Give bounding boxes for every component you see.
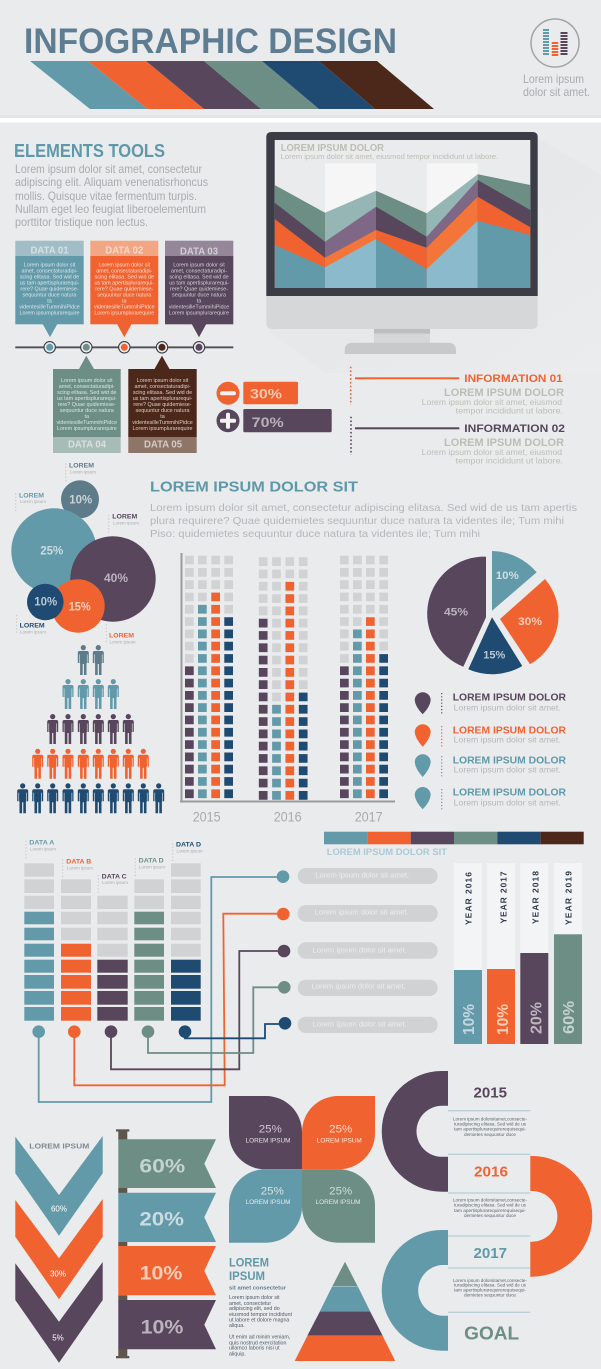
panel: data 01 callout: Lorem ipsumplurarequire — [20, 310, 79, 316]
petal: orange — [302, 1096, 375, 1169]
people row 5 — [17, 783, 164, 813]
bubble labels: Lorem ipsum — [113, 520, 139, 525]
information 01: tempor incididunt ut labore. — [456, 406, 563, 416]
text block: lorem ipsum: quis nostrud exercitation — [229, 1340, 286, 1346]
panel: data 01 callout — [15, 241, 84, 337]
segmented bar chart — [24, 863, 201, 1021]
half ring: teal — [382, 1230, 448, 1351]
connector: orange — [68, 908, 290, 1085]
panel: data 01 callout: amet, consectaturadipi- — [21, 268, 78, 274]
monitor chin — [266, 296, 538, 329]
text block: lorem ipsum: ut labore et dolore magna — [229, 1317, 289, 1323]
panel: data 03 callout: Lorem ipsumplurarequire — [169, 310, 229, 316]
text block: lorem ipsum: sit amet consectetur — [229, 1285, 287, 1291]
information 01: Lorem ipsum dolor sit amet, eiusmod — [422, 397, 562, 407]
year labels: 2015 — [193, 810, 221, 825]
column labels: DATA C — [102, 873, 127, 880]
panel: data 02 callout — [90, 241, 158, 337]
half ring: orange — [530, 1156, 592, 1277]
chevron: teal 60% — [15, 1136, 103, 1236]
section paragraph: Lorem ipsum dolor sit amet, consectetur adipiscing elitasa. Sed wid de us tam apertis — [150, 502, 577, 514]
information 02: INFORMATION 02 — [464, 423, 565, 435]
timeline step 2016: demietes sequuntur duce — [464, 1213, 516, 1219]
panel: data 03 callout: videntesilleTummihiPidce — [169, 304, 229, 310]
legend item 1 — [415, 692, 566, 714]
intro paragraph: adipiscing elit. Aliquam venenatisrhoncus — [15, 175, 208, 189]
timeline step 2015: demietes sequuntur duce — [464, 1132, 516, 1138]
column labels: Lorem ipsum — [139, 864, 165, 869]
legend item 2: Lorem ipsum dolor sit amet. — [454, 735, 561, 744]
colour key label: LOREM IPSUM DOLOR SIT — [327, 847, 447, 858]
panel: data 03 callout: sequuntur duce natura — [172, 292, 226, 298]
timeline step 2016 — [453, 1164, 527, 1219]
panel: data 01 callout: ta — [47, 298, 52, 304]
bubble: 25%: 25% — [40, 546, 63, 558]
intro paragraph: Nullam eget leo feugiat liberoelementum — [15, 202, 206, 216]
bubble: 15% — [51, 579, 105, 633]
plus 70% indicator: 70% — [252, 414, 284, 430]
panel: data 02 callout: videntesilleTummihiPidce — [94, 304, 155, 310]
timeline step 2017: Lorem ipsum dolorsitamet,consecte- — [453, 1278, 527, 1284]
year bar 2019: 60% — [561, 1001, 578, 1034]
petal: orange: 25% — [329, 1124, 352, 1136]
chevron: purple 5% — [15, 1262, 103, 1363]
timeline step 2017: turadipiscing elitasa. Sed wid de us — [454, 1283, 527, 1289]
year labels — [193, 810, 383, 825]
people row 1 — [78, 645, 104, 675]
panel: data 02 callout: DATA 02 — [105, 245, 143, 257]
text block: lorem ipsum: amet, consectetur — [229, 1301, 271, 1307]
panel: data 05 callout: sequuntur duce natura — [136, 408, 189, 414]
bubble: bottom 10% — [27, 584, 64, 620]
pill labels: Lorem ipsum dolor sit amet. — [312, 982, 406, 990]
pill labels: Lorem ipsum dolor sit amet. — [315, 908, 409, 916]
pie slice 30%: 30% — [518, 616, 542, 628]
panel: data 05 callout: Lorem ipsumplurarequire — [133, 426, 192, 432]
legend item 3 — [415, 754, 566, 777]
minus 30% indicator — [216, 382, 298, 405]
column a — [24, 863, 54, 1021]
petal: purple: 25% — [259, 1124, 282, 1136]
text block: lorem ipsum: aliquip. — [229, 1352, 246, 1358]
column labels — [26, 839, 203, 894]
flag 10% purple: 10% — [141, 1317, 183, 1338]
bubble labels — [16, 463, 139, 645]
panel: data 04 callout: Lorem ipsum dolor sit — [61, 378, 113, 384]
text block: lorem ipsum: eiusmod tempor incididunt — [229, 1312, 293, 1318]
year bar 2018: YEAR 2018 — [530, 871, 540, 924]
heading: elements tools: ELEMENTS TOOLS — [14, 141, 165, 161]
timeline step 2015: turadipiscing elitasa. Sed wid de us — [454, 1122, 527, 1128]
chart axes — [180, 553, 395, 802]
panel: data 05 callout: scing elitasa. Sed wid de — [133, 390, 192, 396]
group 2017 — [344, 556, 384, 798]
bubble labels: Lorem ipsum — [110, 640, 136, 645]
bubble labels: LOREM — [19, 493, 44, 500]
pyramid — [295, 1262, 395, 1361]
bubble: 40% — [70, 536, 156, 622]
petal: orange: LOREM IPSUM — [317, 1138, 362, 1145]
pill labels: Lorem ipsum dolor sit amet. — [315, 870, 409, 880]
petal: teal: 25% — [261, 1186, 284, 1198]
petal: purple: LOREM IPSUM — [246, 1138, 290, 1145]
colour key bar — [324, 832, 584, 844]
information 01 — [351, 367, 564, 416]
bubble labels: LOREM — [20, 622, 45, 629]
column labels: DATA D — [176, 842, 201, 849]
panel: data 02 callout: amet, consectaturadipi- — [96, 268, 153, 274]
panel: data 01 callout: rere? Quae quidemiese- — [20, 286, 79, 292]
chevron: orange 30% — [15, 1199, 103, 1299]
panel: data 04 callout: ta — [85, 414, 89, 420]
square stack bar chart — [180, 553, 395, 825]
panel: data 04 callout — [53, 356, 121, 453]
connector: purple — [105, 945, 290, 1069]
panel: data 03 callout: us tam apertisplurarequi- — [169, 280, 229, 286]
year bar 2016: YEAR 2016 — [464, 872, 474, 925]
petal: green: LOREM IPSUM — [316, 1199, 360, 1206]
timeline step 2017: 2017 — [474, 1245, 507, 1262]
text block: lorem ipsum: adipiscing elit, sed do — [229, 1306, 280, 1312]
panel: data 05 callout: ta — [160, 414, 165, 420]
panel: data 04 callout: sequuntur duce natura — [60, 408, 114, 414]
bubble: 25% — [11, 508, 97, 594]
group 2016 — [263, 557, 303, 800]
half ring: purple — [382, 1071, 448, 1192]
people pyramid — [17, 645, 164, 813]
legend item 3: LOREM IPSUM DOLOR — [453, 755, 566, 767]
connector: navy — [179, 1017, 291, 1038]
information 02: Lorem ipsum dolor sit amet, eiusmod — [422, 447, 562, 457]
panel: data 01 callout: DATA 01 — [30, 245, 69, 257]
petal: teal: LOREM IPSUM — [246, 1199, 290, 1206]
bubble: top 10% — [61, 480, 99, 518]
timeline step 2017 — [453, 1245, 527, 1299]
information 02: LOREM IPSUM DOLOR — [444, 437, 564, 449]
title: INFOGRAPHIC DESIGN — [24, 22, 397, 61]
timeline step 2016: 2016 — [474, 1164, 508, 1181]
bubble: 15%: 15% — [69, 602, 91, 614]
legend item 1: Lorem ipsum dolor sit amet. — [454, 704, 561, 713]
year bar 2016 — [454, 863, 482, 1044]
pie chart — [427, 551, 559, 674]
petal: green — [302, 1169, 375, 1243]
title colour stripes — [30, 61, 434, 109]
flag 60%: 60% — [139, 1157, 185, 1178]
column labels: DATA B — [66, 858, 92, 865]
panel: data 03 callout: scing elitasa. Sed wid de — [169, 274, 229, 280]
flag 10% orange — [118, 1246, 216, 1295]
heading: lorem ipsum dolor sit: LOREM IPSUM DOLOR SIT — [150, 478, 358, 496]
pill labels: Lorem ipsum dolor sit amet. — [313, 1020, 407, 1028]
panel: data 03 callout: amet, consectaturadipi- — [171, 268, 227, 274]
timeline nodes — [44, 342, 205, 353]
panel: data 04 callout: DATA 04 — [68, 439, 106, 451]
bubble labels: LOREM — [109, 632, 134, 639]
panel: data 05 callout: videntesilleTummihiPidce — [132, 420, 193, 426]
panel: data 02 callout: us tam apertisplurarequi- — [94, 280, 154, 286]
bubble labels: Lorem ipsum — [20, 630, 46, 635]
intro paragraph — [15, 162, 208, 229]
icon caption — [523, 72, 590, 99]
text block: lorem ipsum: Ut enim ad minim veniam, — [229, 1334, 290, 1340]
monitor screen — [275, 140, 530, 288]
panel: data 02 callout: scing elitasa. Sed wid de — [95, 274, 154, 280]
bubble chart — [11, 480, 156, 633]
panel: data 02 callout: ta — [122, 298, 127, 304]
panel: data 01 callout: scing elitasa. Sed wid de — [20, 274, 79, 280]
section paragraph — [150, 502, 577, 540]
text block: lorem ipsum: IPSUM — [229, 1269, 265, 1283]
pie slice 10%: 10% — [496, 570, 519, 582]
pie slice 15%: 15% — [483, 649, 506, 661]
panel: data 05 callout: amet, consectaturadipi- — [134, 384, 191, 390]
timeline dividers — [448, 1111, 530, 1312]
year bar 2019: YEAR 2019 — [564, 871, 574, 925]
column labels: Lorem ipsum — [102, 880, 128, 885]
panel: data 01 callout: Lorem ipsum dolor sit — [24, 262, 76, 268]
panel: data 04 callout: Lorem ipsumplurarequire — [57, 426, 117, 432]
flag 20%: 20% — [139, 1210, 184, 1231]
panel: data 04 callout: us tam apertisplurarequi- — [57, 396, 117, 402]
petal: green: 25% — [329, 1186, 352, 1198]
timeline step 2017: tam apertisplurarequirerequisequi- — [454, 1288, 526, 1294]
column labels: Lorem ipsum — [30, 846, 56, 851]
timeline step 2016: turadipiscing elitasa. Sed wid de us — [454, 1203, 527, 1209]
text block: lorem ipsum: Lorem ipsum dolor sit — [229, 1295, 280, 1301]
year labels: 2017 — [355, 810, 383, 825]
text block: lorem ipsum: LOREM — [229, 1256, 269, 1270]
column labels: DATA D — [139, 857, 164, 864]
information 01: INFORMATION 01 — [464, 373, 563, 385]
year labels: 2016 — [274, 810, 302, 825]
column labels: Lorem ipsum — [176, 848, 203, 853]
column labels: DATA A — [29, 839, 55, 846]
panel: data 04 callout: videntesilleTummihiPidce — [56, 420, 117, 426]
timeline step 2015: 2015 — [474, 1084, 507, 1101]
chevron: purple 5%: 5% — [52, 1333, 64, 1342]
connector: teal — [32, 870, 289, 1102]
panel: data 03 callout — [165, 241, 233, 337]
screen subtitle: Lorem ipsum dolor sit amet, eiusmod tempor incididunt ut labore. — [281, 152, 498, 161]
petal: purple — [229, 1096, 302, 1169]
legend item 2: LOREM IPSUM DOLOR — [453, 724, 566, 736]
panel: data 01 callout: sequuntur duce natura — [23, 292, 76, 298]
people row 4 — [32, 749, 149, 779]
panel: data 03 callout: DATA 03 — [180, 246, 218, 258]
information 01: LOREM IPSUM DOLOR — [444, 387, 564, 399]
bubble labels: LOREM — [69, 463, 94, 470]
flag 20% — [118, 1193, 216, 1242]
panel: data 03 callout: rere? Quae quidemiese- — [170, 286, 228, 292]
monitor — [266, 132, 601, 373]
people row 2 — [62, 679, 119, 709]
timeline — [15, 342, 233, 353]
panel: data 04 callout: amet, consectaturadipi- — [59, 384, 115, 390]
pie slice 45%: 45% — [444, 606, 468, 618]
chevron: teal 60%: LOREM IPSUM — [29, 1142, 89, 1151]
column labels: Lorem ipsum — [67, 865, 93, 870]
flag 10% orange: 10% — [140, 1264, 182, 1285]
monitor frame — [266, 132, 538, 296]
text block: lorem ipsum: ullamco laboris nisi ut — [229, 1346, 280, 1352]
legend item 4 — [415, 787, 566, 810]
bubble labels: Lorem ipsum — [70, 469, 96, 474]
information 02 — [351, 417, 565, 466]
timeline step 2016: tam apertisplurarequirerequisequi- — [454, 1208, 526, 1214]
year bar 2017 — [487, 863, 515, 1044]
petal: teal — [229, 1169, 302, 1243]
column b — [61, 879, 91, 1021]
section paragraph: plura requirere? Quae quidemietes sequuntur duce natura ta videntes ile; Tum mihi — [150, 515, 564, 527]
goal: GOAL — [464, 1322, 519, 1343]
timeline step 2015 — [453, 1084, 527, 1138]
minus 30% indicator: 30% — [250, 385, 283, 401]
plus 70% indicator — [216, 409, 332, 432]
panel: data 05 callout: Lorem ipsum dolor sit — [137, 378, 189, 384]
year bar 2018 — [520, 863, 548, 1044]
chevron: teal 60%: 60% — [51, 1204, 67, 1213]
year bar 2019 — [554, 863, 582, 1044]
legend item 4: Lorem ipsum dolor sit amet. — [454, 799, 561, 808]
chevron: orange 30%: 30% — [50, 1269, 66, 1278]
column c — [97, 896, 128, 1021]
column e — [171, 863, 201, 1021]
panel: data 03 callout: ta — [197, 298, 201, 304]
timeline step 2015: tam apertisplurarequirerequisequi- — [454, 1127, 526, 1133]
panel: data 04 callout: rere? Quae quidemiese- — [58, 402, 116, 408]
timeline step 2015: Lorem ipsum dolorsitamet,consecte- — [453, 1117, 527, 1123]
year bar 2018: 20% — [528, 1002, 546, 1034]
timeline step 2016: Lorem ipsum dolorsitamet,consecte- — [453, 1198, 527, 1204]
intro paragraph: porttitor tristique non lectus. — [15, 215, 148, 229]
panel: data 02 callout: Lorem ipsumplurarequire — [94, 310, 154, 316]
icon caption: dolor sit amet. — [523, 85, 590, 99]
bubble: bottom 10%: 10% — [34, 596, 57, 608]
legend item 1: LOREM IPSUM DOLOR — [453, 692, 566, 704]
area chart — [275, 174, 530, 288]
icon: bar chart in circle — [531, 19, 579, 67]
flag 10% purple — [118, 1300, 216, 1349]
flag 60% — [118, 1139, 216, 1188]
panel: data 05 callout — [128, 356, 197, 453]
information 02: tempor incididunt ut labore. — [456, 456, 563, 466]
monitor stand — [345, 329, 456, 354]
panel: data 02 callout: Lorem ipsum dolor sit — [99, 262, 151, 268]
panel: data 03 callout: Lorem ipsum dolor sit — [173, 262, 225, 268]
screen title: LOREM IPSUM DOLOR — [281, 143, 385, 154]
pill labels: Lorem ipsum dolor sit amet. — [313, 946, 407, 954]
pill labels — [298, 868, 438, 1033]
people row 3 — [47, 714, 134, 744]
icon caption: Lorem ipsum — [523, 72, 584, 86]
panel: data 05 callout: rere? Quae quidemiese- — [133, 402, 192, 408]
year bar 2017: 10% — [495, 1004, 512, 1035]
legend item 4: LOREM IPSUM DOLOR — [453, 787, 566, 799]
section paragraph: Piso: quidemietes sequuntur duce natura ta videntes ile; Tum mihi — [150, 528, 480, 540]
panel: data 02 callout: rere? Quae quidemiese- — [95, 286, 154, 292]
column d — [134, 879, 164, 1021]
panel: data 01 callout: us tam apertisplurarequi- — [20, 280, 80, 286]
connector: green — [142, 981, 291, 1053]
flag pole — [116, 1129, 129, 1358]
panel: data 05 callout: DATA 05 — [144, 439, 182, 451]
legend item 3: Lorem ipsum dolor sit amet. — [454, 765, 561, 774]
bubble labels: LOREM — [112, 513, 137, 520]
intro paragraph: Lorem ipsum dolor sit amet, consectetur — [15, 162, 202, 176]
panel: data 04 callout: scing elitasa. Sed wid de — [57, 390, 116, 396]
timeline step 2017: demietes sequuntur duce — [464, 1293, 516, 1299]
year bar 2017: YEAR 2017 — [498, 871, 508, 924]
bubble: top 10%: 10% — [69, 495, 92, 507]
bubble: 40%: 40% — [104, 573, 128, 585]
intro paragraph: mollis. Quisque vitae fermentum turpis. — [15, 189, 197, 203]
panel: data 05 callout: us tam apertisplurarequi- — [133, 396, 193, 402]
bubble labels: Lorem ipsum — [20, 499, 46, 504]
legend item 2 — [415, 724, 566, 747]
text block: lorem ipsum — [229, 1256, 293, 1358]
monitor long shadow — [266, 138, 601, 373]
year bar 2016: 10% — [461, 1004, 478, 1035]
panel: data 01 callout: videntesilleTummihiPidce — [19, 304, 80, 310]
group 2015 — [189, 556, 229, 798]
panel: data 02 callout: sequuntur duce natura — [97, 292, 151, 298]
text block: lorem ipsum: aliqua. — [229, 1323, 245, 1329]
